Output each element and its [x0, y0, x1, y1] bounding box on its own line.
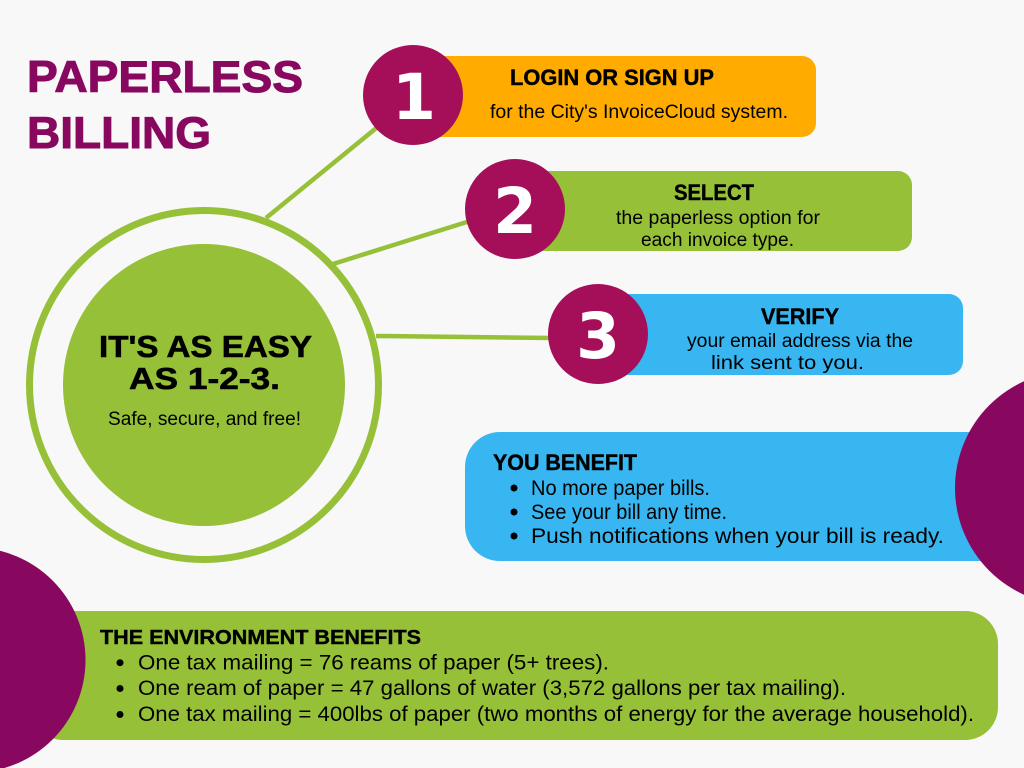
step 3 number: 3 [576, 300, 620, 373]
environment list: One tax mailing = 76 reams of paper (5+ trees). [138, 652, 609, 674]
environment background [30, 611, 998, 740]
you benefit list: No more paper bills. [531, 477, 710, 500]
title: PAPERLESS [27, 53, 303, 102]
step 2 text [616, 208, 821, 251]
central hub [30, 210, 378, 560]
you benefit background [465, 432, 1024, 561]
title: BILLING [27, 109, 211, 158]
step 2 bar [530, 171, 912, 251]
step 2 text: the paperless option for [616, 208, 821, 229]
panel: you benefit [465, 432, 1024, 561]
you benefit list: See your bill any time. [531, 501, 727, 524]
step 1 badge [363, 45, 463, 145]
decorative circle: bottom left [0, 548, 86, 768]
decorative circle: right [955, 371, 1024, 605]
step 2 number: 2 [493, 175, 537, 248]
connector line: step 3 [376, 336, 552, 338]
step 3 [548, 284, 963, 384]
hub heading: AS 1-2-3. [129, 361, 280, 396]
environment list: One tax mailing = 400lbs of paper (two months of energy for the average household). [138, 703, 974, 726]
you benefit list [510, 477, 944, 548]
step 3 text: your email address via the [687, 331, 913, 352]
outer ring [30, 210, 378, 560]
connector line: step 2 [333, 221, 470, 264]
step 1 heading: LOGIN OR SIGN UP [510, 65, 714, 90]
environment list [116, 652, 974, 726]
inner circle [63, 244, 345, 526]
hub heading: IT'S AS EASY [99, 329, 312, 364]
step 3 text: link sent to you. [711, 353, 864, 374]
hub heading [99, 329, 312, 396]
step 3 badge [548, 284, 648, 384]
title [27, 53, 303, 158]
step 1 bar [425, 56, 816, 137]
you benefit list: Push notifications when your bill is ready. [531, 525, 944, 548]
connector line: step 1 [266, 125, 380, 218]
step 3 text [687, 331, 913, 374]
step 2 badge [465, 159, 565, 259]
step 2 text: each invoice type. [641, 230, 794, 251]
step 3 bar [610, 294, 963, 375]
hub tagline: Safe, secure, and free! [108, 409, 301, 430]
environment heading: THE ENVIRONMENT BENEFITS [100, 626, 421, 649]
panel: environment benefits [30, 611, 998, 740]
step 2 [465, 159, 912, 259]
step 1 number: 1 [392, 61, 436, 134]
step 2 heading: SELECT [674, 180, 755, 205]
step 3 heading: VERIFY [761, 304, 839, 329]
you benefit heading: YOU BENEFIT [493, 450, 638, 475]
step 1 [363, 45, 816, 145]
environment list: One ream of paper = 47 gallons of water (3,572 gallons per tax mailing). [138, 677, 846, 700]
step 1 text: for the City's InvoiceCloud system. [490, 102, 788, 123]
